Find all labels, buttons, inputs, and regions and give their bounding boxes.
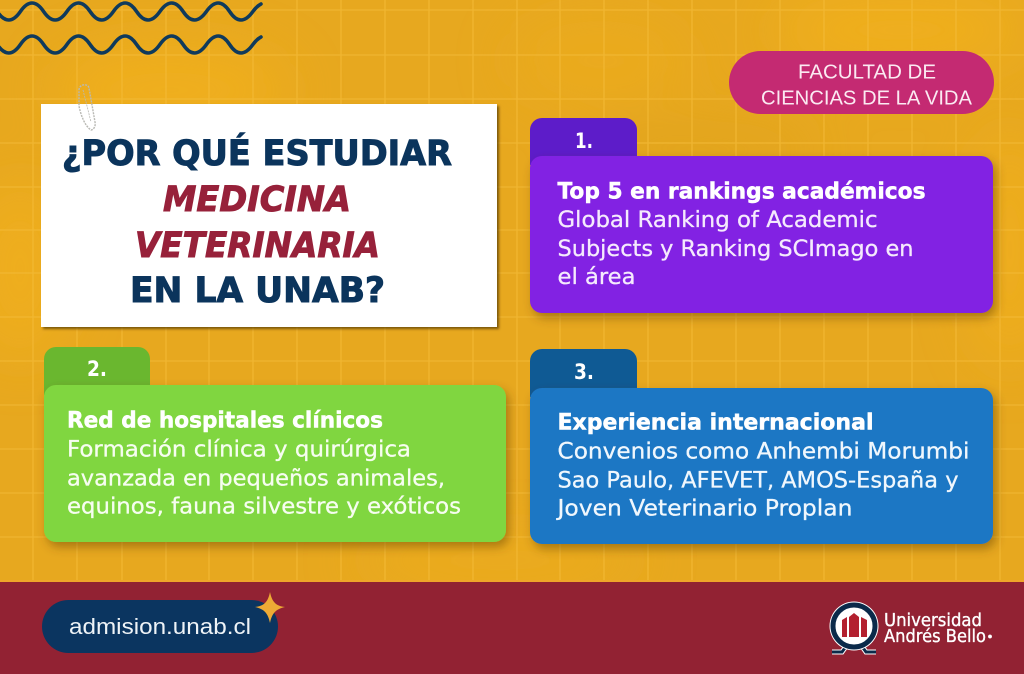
logo wordmark: Andrés Bello [884,626,986,647]
panel 1: rankings [530,118,993,313]
text 2: Formación clínica y quirúrgica [67,436,411,462]
website pill [42,600,278,653]
decorative wavy lines [0,3,261,53]
text 1: Subjects y Ranking SCImago en [558,236,914,262]
tab 3 [530,349,637,397]
text 1 [558,178,926,290]
text 1: Global Ranking of Academic [558,207,878,233]
logo: Universidad Andrés Bello [830,602,992,652]
faculty pill [729,51,994,114]
panel 2: hospitals [44,347,506,542]
text 3: Convenios como Anhembi Morumbi [558,438,970,464]
faculty pill: CIENCIAS DE LA VIDA [761,88,973,110]
number 2: 2. [87,357,107,381]
logo wordmark: Universidad [884,610,982,631]
tab 1 [530,118,637,165]
number 1: 1. [575,129,593,153]
card body 3 [530,388,993,544]
text 2: equinos, fauna silvestre y exóticos [67,494,461,520]
text 1: Top 5 en rankings académicos [558,178,926,204]
icon: paperclip [79,85,95,130]
text 3: Sao Paulo, AFEVET, AMOS-España y [558,468,958,494]
title text [62,132,452,311]
tab 2 [44,347,150,395]
title card [41,104,497,327]
white card background [41,104,497,327]
number 3: 3. [574,360,594,384]
text 2: avanzada en pequeños animales, [67,466,445,492]
card body 1 [530,156,993,313]
logo wordmark [884,610,992,647]
icon: star [255,592,285,623]
panel 3: international [530,349,993,544]
title text: EN LA UNAB? [130,271,385,311]
title text: MEDICINA [163,180,351,220]
logo seal [830,602,878,652]
text 3: Experiencia internacional [558,410,874,436]
text 3: Joven Veterinario Proplan [555,496,852,522]
title text: VETERINARIA [135,226,380,266]
faculty pill: FACULTAD DE [798,62,936,84]
text 2 [67,408,461,520]
footer band [0,580,1024,674]
card body 2 [44,385,506,542]
text 1: el área [558,264,636,290]
website pill: admision.unab.cl [69,614,251,639]
title text: ¿POR QUÉ ESTUDIAR [62,132,452,174]
text 3 [555,410,970,522]
text 2: Red de hospitales clínicos [67,408,383,434]
